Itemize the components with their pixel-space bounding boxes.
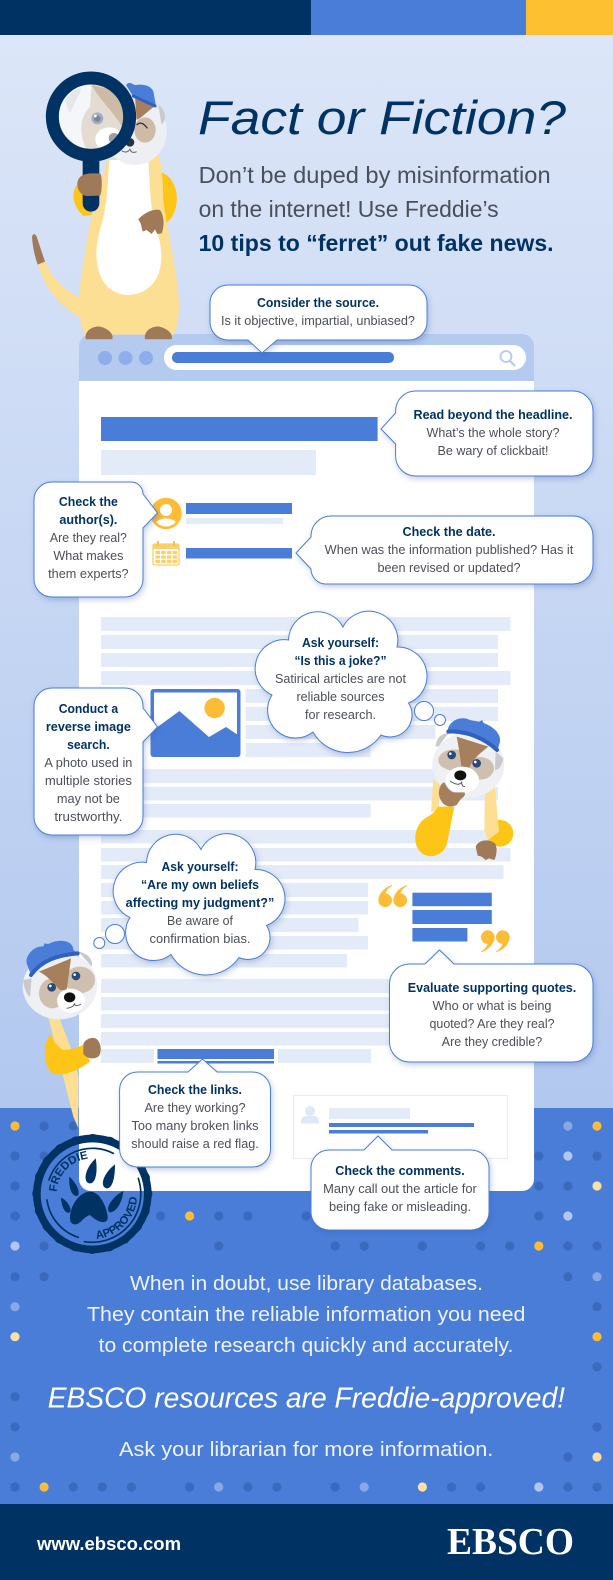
thought cloud: own beliefs: affecting my judgment?” (126, 896, 274, 910)
callout: reverse image search (34, 688, 158, 835)
callout: check the links: Too many broken links (132, 1119, 258, 1133)
callout: check the comments: Many call out the article for (323, 1182, 477, 1196)
callout: reverse image search: multiple stories (45, 774, 132, 788)
icon: image placeholder (150, 689, 240, 757)
callout: check the links (120, 1059, 271, 1167)
callout: check the links: should raise a red flag. (131, 1137, 259, 1151)
callout: reverse image search: search. (67, 738, 110, 752)
callout: consider the source: Consider the source. (257, 296, 379, 310)
author bars (186, 503, 292, 524)
callout: read beyond the headline: Be wary of clickbait! (438, 444, 548, 458)
callout: evaluate supporting quotes: Who or what is being (432, 999, 552, 1013)
icon: author avatar (150, 498, 182, 532)
callout: evaluate supporting quotes: Are they credible? (442, 1035, 542, 1049)
thought cloud: is this a joke (255, 611, 446, 753)
callout: consider the source: Is it objective, impartial, unbiased? (221, 314, 415, 328)
thought cloud: own beliefs: Ask yourself: (162, 860, 238, 874)
thought cloud: own beliefs: confirmation bias. (150, 932, 250, 946)
closing message: They contain the reliable information you need (87, 1304, 525, 1326)
intro text: 10 tips to “ferret” out fake news. (199, 230, 554, 256)
callout: check the authors: them experts? (48, 567, 129, 581)
quote bars (412, 893, 492, 942)
ferret thinking on right (415, 718, 513, 860)
thought cloud: is this a joke: Satirical articles are not (275, 672, 407, 686)
callout: reverse image search: may not be (57, 792, 120, 806)
thought cloud: own beliefs (94, 834, 285, 975)
top colour bar (0, 0, 613, 35)
thought cloud: is this a joke: reliable sources (296, 690, 384, 704)
headline placeholder bars (101, 417, 378, 475)
intro text: Don’t be duped by misinformation (199, 162, 551, 188)
callout: check the comments (311, 1136, 489, 1230)
callout: check the date (296, 516, 593, 584)
website url: www.ebsco.com (36, 1534, 181, 1554)
callout: evaluate supporting quotes: Evaluate supporting quotes. (408, 981, 576, 995)
callout: reverse image search: A photo used in (44, 756, 132, 770)
badge: Freddie approved: APPROVED (96, 1197, 137, 1239)
callout: read beyond the headline (381, 391, 593, 476)
closing message (87, 1273, 525, 1357)
thought cloud: own beliefs: Be aware of (167, 914, 234, 928)
thought cloud: is this a joke: for research. (305, 708, 376, 722)
title: Fact or Fiction? (198, 91, 566, 144)
icon: calendar (153, 541, 179, 565)
callout: check the comments: Check the comments. (335, 1164, 465, 1178)
callout: check the date: Check the date. (402, 525, 496, 539)
intro text: on the internet! Use Freddie’s (199, 196, 499, 222)
callout: read beyond the headline: What’s the whole story? (426, 426, 560, 440)
thought cloud: is this a joke: “Is this a joke?” (294, 654, 386, 668)
callout: check the authors: Are they real? (50, 531, 127, 545)
ferret peeking on left (20, 941, 101, 1128)
tagline: EBSCO resources are Freddie-approved! (48, 1382, 565, 1414)
callout: check the date: been revised or updated? (378, 561, 521, 575)
icon: quote marks (378, 885, 510, 952)
callout: check the authors: Check the (59, 495, 118, 509)
librarian note: Ask your librarian for more information. (119, 1439, 493, 1461)
callout: evaluate supporting quotes (390, 950, 593, 1062)
callout: check the authors: What makes (53, 549, 123, 563)
callout: check the comments: being fake or misleading. (329, 1200, 471, 1214)
callout: reverse image search: Conduct a (59, 702, 119, 716)
article text placeholder lines (101, 617, 510, 1063)
intro text (199, 162, 554, 256)
date bar (186, 548, 292, 558)
EBSCO logo: EBSCO (447, 1521, 574, 1563)
callout: consider the source (210, 285, 427, 353)
callout: evaluate supporting quotes: quoted? Are they real? (430, 1017, 555, 1031)
closing message: to complete research quickly and accurately. (99, 1335, 513, 1357)
comment box (294, 1096, 508, 1158)
link placeholder (158, 1049, 274, 1064)
callout: check the links: Check the links. (148, 1083, 242, 1097)
blue band (0, 1108, 613, 1504)
closing message: When in doubt, use library databases. (130, 1273, 483, 1295)
browser window (79, 334, 534, 1191)
callout: check the date: When was the information published? Has it (325, 543, 574, 557)
badge: Freddie approved (32, 1134, 152, 1254)
callout: reverse image search: trustworthy. (54, 810, 122, 824)
background (0, 35, 613, 1110)
badge: Freddie approved: FREDDIE (48, 1150, 88, 1192)
callout: reverse image search: reverse image (46, 720, 131, 734)
thought cloud: own beliefs: “Are my own beliefs (141, 878, 259, 892)
callout: check the authors (34, 482, 158, 597)
thought cloud: is this a joke: Ask yourself: (302, 636, 379, 650)
callout: check the links: Are they working? (144, 1101, 246, 1115)
callout: read beyond the headline: Read beyond the headline. (414, 408, 572, 422)
ferret with magnifying glass (32, 78, 179, 339)
footer bar (0, 1504, 613, 1580)
dot pattern (10, 1121, 602, 1492)
callout: check the authors: author(s). (59, 513, 117, 527)
